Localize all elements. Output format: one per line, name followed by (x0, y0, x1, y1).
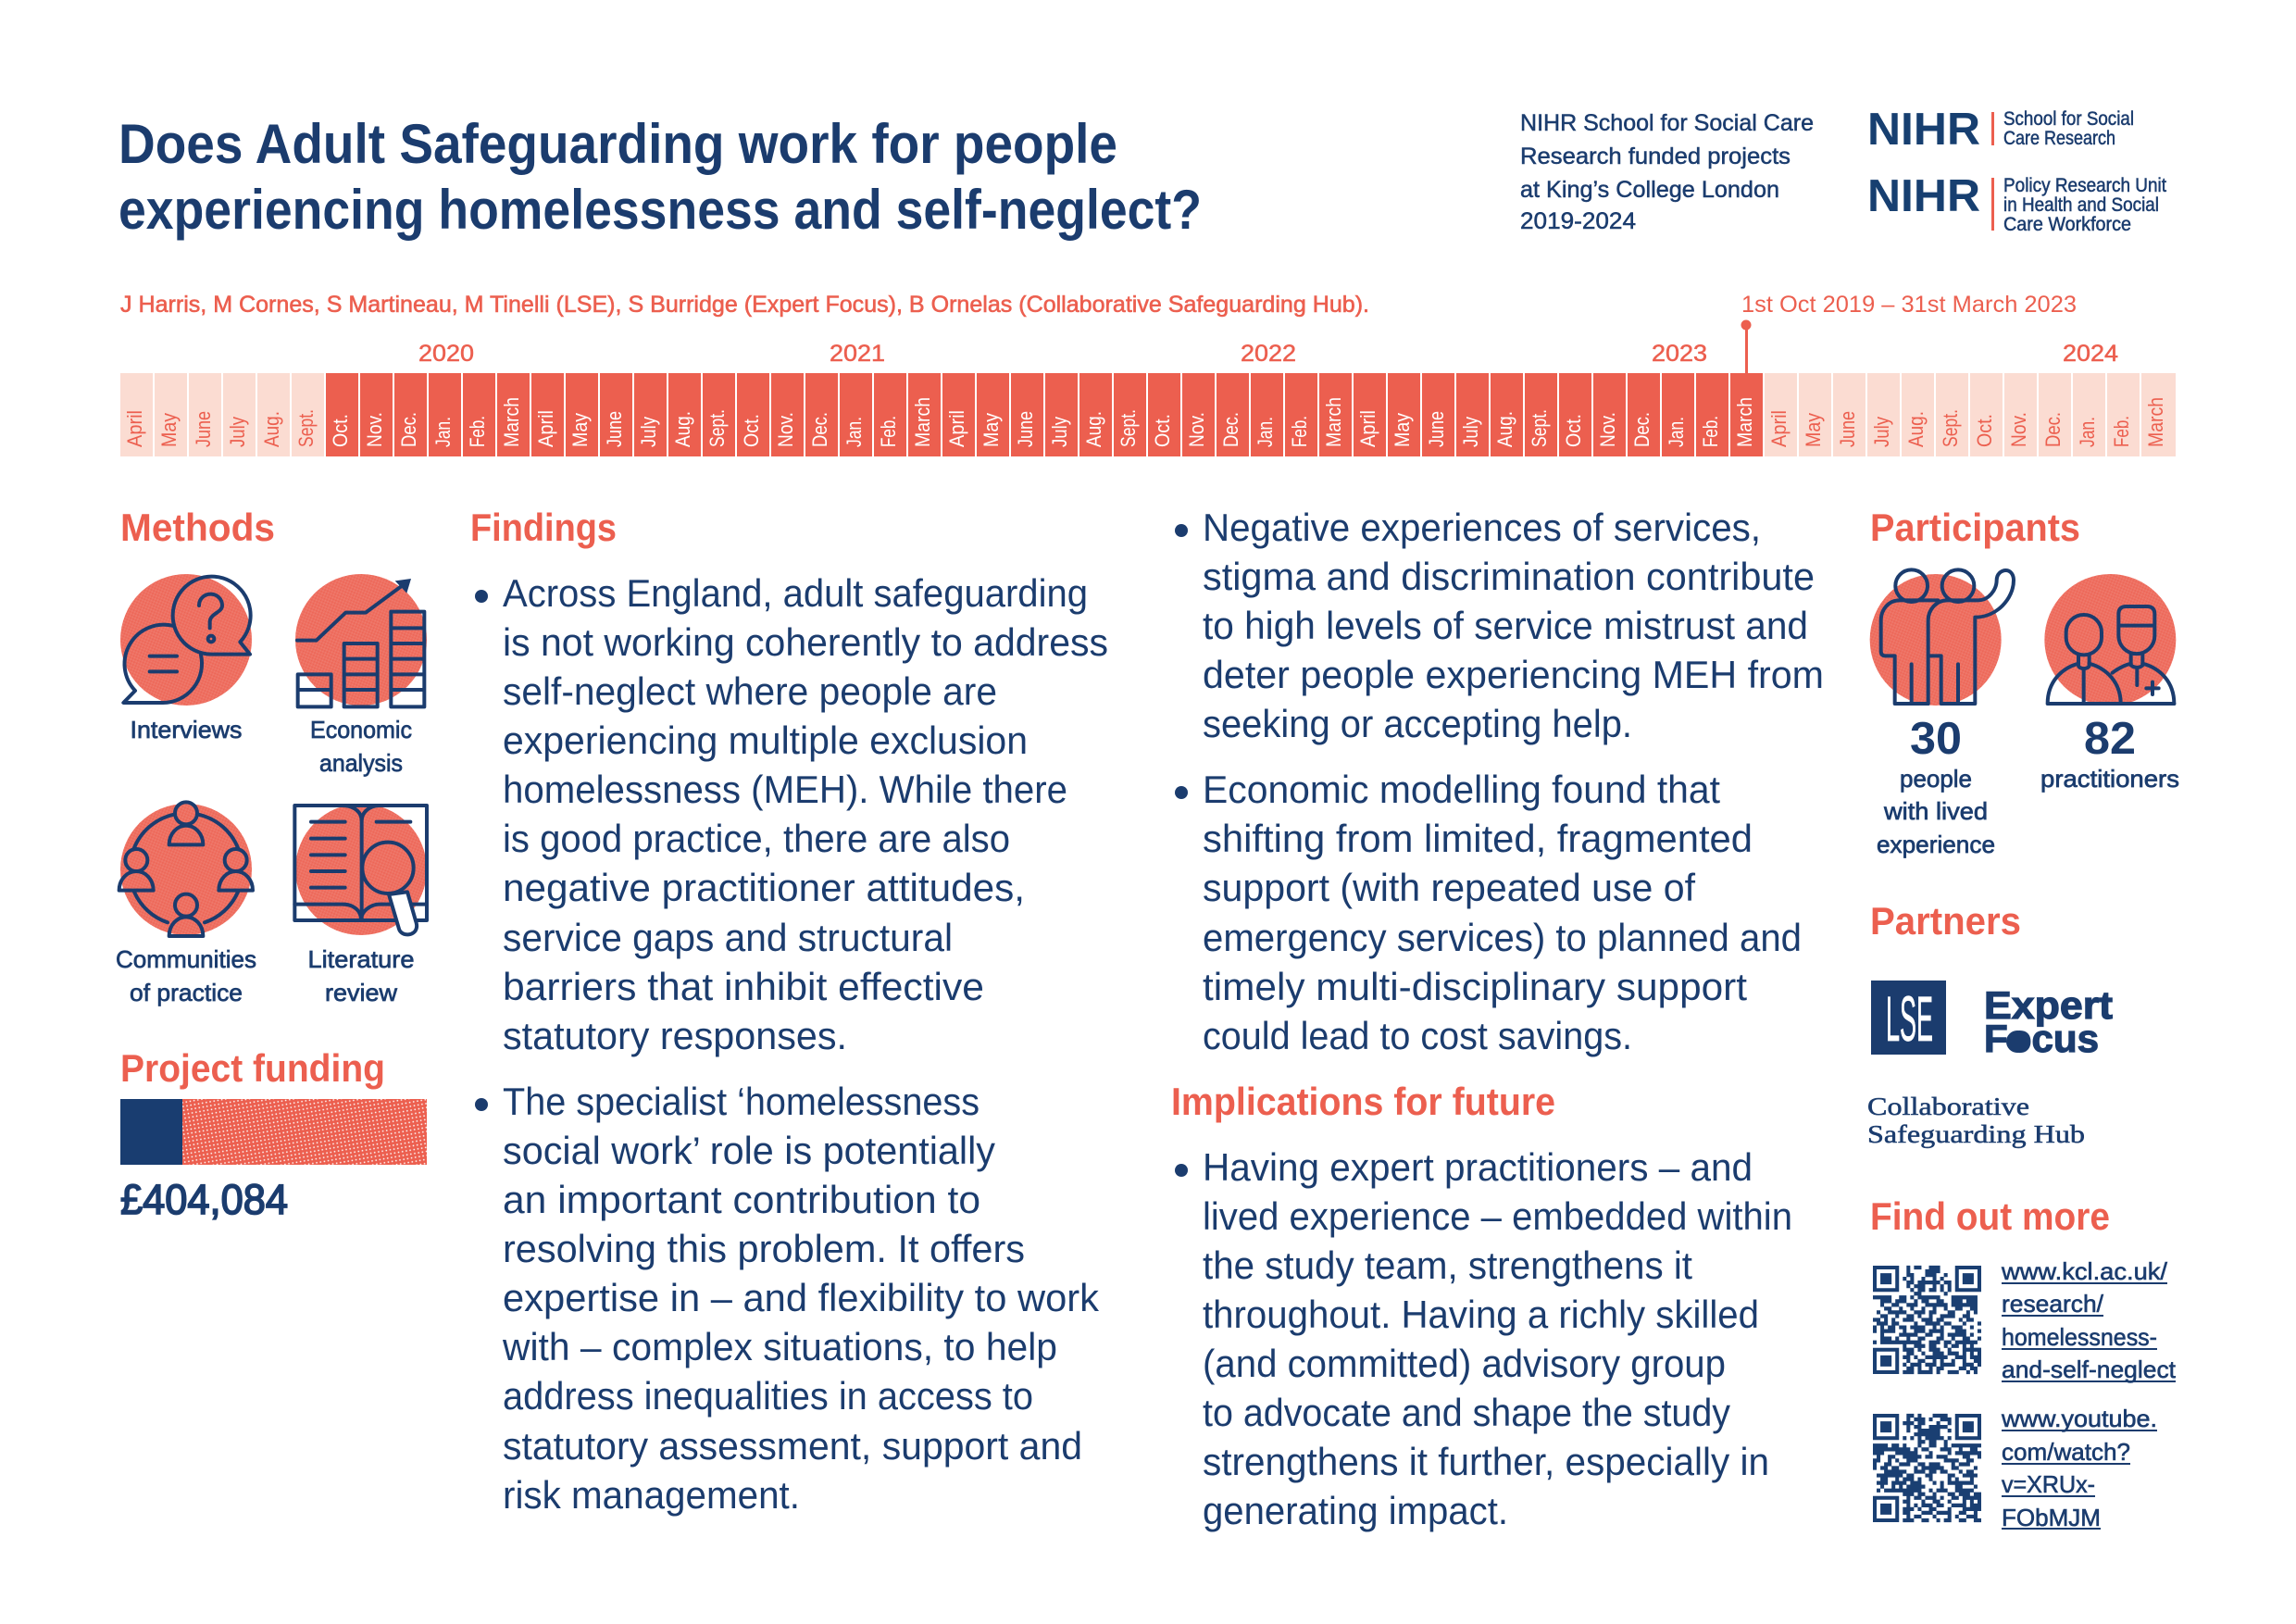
label: economic analysis: analysis (319, 749, 403, 777)
logo: Expert Focus: Focus (1984, 1017, 2099, 1060)
findings bullet 3: deter people experiencing MEH from (1203, 653, 1824, 696)
findings bullet 2: address inequalities in access to (503, 1374, 1033, 1418)
month labels: Nov. (363, 412, 386, 447)
findings bullet 1: experiencing multiple exclusion (503, 718, 1028, 762)
month labels: Feb. (466, 416, 489, 447)
month labels: April (945, 410, 968, 447)
funding statement: at King’s College London (1520, 177, 1779, 203)
findings bullet 2: social work’ role is potentially (503, 1129, 995, 1172)
label: literature review: review (325, 979, 397, 1006)
project dates label: 1st Oct 2019 – 31st March 2023 (1741, 292, 2077, 318)
link: KCL project page: homelessness- (2002, 1323, 2157, 1351)
month labels: April (1356, 410, 1379, 447)
logo: NIHR School for Social Care Research (1867, 105, 2134, 155)
label: literature review: Literature (307, 945, 415, 973)
month labels: Aug. (1082, 411, 1105, 447)
findings bullet 4: shifting from limited, fragmented (1203, 817, 1753, 860)
stat: 30 people: people (1900, 765, 1972, 793)
year labels (418, 341, 2118, 367)
findings bullet 2: risk management. (503, 1473, 800, 1517)
icon: people with lived experience (1870, 569, 2014, 706)
heading: findings: Findings (470, 506, 617, 549)
findings bullet 3: Negative experiences of services, (1203, 506, 1761, 549)
light cells: before project (120, 373, 324, 456)
year labels: 2023 (1652, 341, 1707, 367)
month labels: Dec. (1630, 412, 1653, 447)
label: communities of practice: Communities (116, 945, 256, 973)
QR code: YouTube video (1873, 1414, 1981, 1522)
month labels (123, 397, 2167, 447)
month labels: Jan. (1254, 417, 1277, 447)
findings bullet 4: emergency services) to planned and (1203, 916, 1802, 959)
month labels: April (534, 410, 557, 447)
year labels: 2022 (1241, 341, 1296, 367)
month labels: Sept. (705, 409, 729, 447)
title: Does Adult Safeguarding work for people (119, 113, 1117, 175)
logo: NIHR School for Social Care Research: Care Research (2003, 128, 2115, 149)
implications text: generating impact. (1203, 1489, 1508, 1532)
link: YouTube video: com/watch? (2002, 1438, 2130, 1466)
month labels: Nov. (774, 412, 797, 447)
light cells: after project (1765, 373, 2176, 456)
logo: Expert Focus (1984, 983, 2113, 1060)
icon: economic analysis (295, 574, 427, 706)
implications text: throughout. Having a richly skilled (1203, 1293, 1759, 1336)
funding statement: 2019-2024 (1520, 208, 1636, 234)
logo: NIHR School for Social Care Research: NIHR (1867, 105, 1980, 155)
findings bullet 2: statutory assessment, support and (503, 1424, 1082, 1468)
month labels: March (2144, 397, 2167, 447)
logo: NIHR Policy Research Unit: NIHR (1867, 171, 1980, 221)
stat: 30 people: experience (1877, 831, 1995, 858)
link: KCL project page: www.kcl.ac.uk/ (2001, 1257, 2168, 1285)
logo: Expert Focus: Expert (1984, 983, 2113, 1027)
month labels: July (226, 417, 249, 447)
implications text: strengthens it further, especially in (1203, 1440, 1769, 1483)
findings bullet 3: stigma and discrimination contribute (1203, 555, 1815, 598)
findings bullet 1: is not working coherently to address (503, 620, 1108, 664)
logo: NIHR Policy Research Unit: Policy Research Unit (2003, 175, 2166, 196)
logo: Collaborative Safeguarding Hub: Safeguarding Hub (1867, 1120, 2085, 1148)
month labels: Oct. (329, 414, 352, 447)
stat: 82 practitioners: practitioners (2040, 765, 2179, 793)
month labels: Sept. (294, 409, 318, 447)
timeline (120, 320, 2176, 456)
month labels: Jan. (431, 417, 455, 447)
logo: NIHR School for Social Care Research: School for Social (2003, 108, 2134, 130)
month labels: March (1733, 397, 1756, 447)
findings bullet 4: support (with repeated use of (1203, 866, 1695, 909)
implications text: to advocate and shape the study (1203, 1391, 1730, 1434)
month labels: Nov. (1185, 412, 1208, 447)
icon: literature review (294, 804, 427, 935)
link: YouTube video (2001, 1405, 2157, 1531)
icon: practitioners (2044, 574, 2176, 706)
month labels: Jan. (842, 417, 866, 447)
month labels: Aug. (1493, 411, 1516, 447)
funding statement: NIHR School for Social Care (1520, 110, 1814, 136)
month labels: Feb. (877, 416, 900, 447)
logo: Collaborative Safeguarding Hub (1867, 1093, 2085, 1148)
year labels: 2021 (830, 341, 885, 367)
funding statement: Research funded projects (1520, 144, 1791, 169)
findings bullet 2: with – complex situations, to help (502, 1325, 1057, 1368)
findings bullet 3: seeking or accepting help. (1203, 702, 1632, 745)
month labels: May (568, 413, 592, 447)
stat: 30 people: 30 (1910, 714, 1962, 764)
heading: partners: Partners (1870, 899, 2021, 943)
icon: communities of practice (119, 802, 253, 936)
implications text: the study team, strengthens it (1203, 1243, 1692, 1287)
stat: 82 practitioners (2040, 714, 2179, 793)
authors: J Harris, M Cornes, S Martineau, M Tinelli (LSE), S Burridge (Expert Focus), B Ornelas (Collaborative Safeguarding Hub). (120, 292, 1369, 318)
findings bullet 2: The specialist ‘homelessness (503, 1080, 980, 1123)
funding amount: £404,084 (120, 1176, 288, 1223)
month labels: Sept. (1528, 409, 1551, 447)
label: economic analysis (310, 716, 412, 777)
month labels: Feb. (1288, 416, 1311, 447)
stat: 30 people: with lived (1883, 797, 1988, 825)
stat: 82 practitioners: 82 (2084, 714, 2136, 764)
implications text: lived experience – embedded within (1203, 1194, 1792, 1238)
findings bullet 1: barriers that inhibit effective (503, 965, 984, 1008)
month labels: Oct. (1151, 414, 1174, 447)
month labels: Dec. (2041, 412, 2065, 447)
month labels: June (603, 411, 626, 447)
month labels: July (1870, 417, 1893, 447)
month labels: June (1014, 411, 1037, 447)
QR code: KCL project page (1873, 1266, 1981, 1374)
logo: NIHR Policy Research Unit: in Health and Social (2003, 194, 2159, 216)
year labels: 2024 (2063, 341, 2118, 367)
findings bullet 2: resolving this problem. It offers (503, 1227, 1025, 1270)
month labels: April (123, 410, 146, 447)
findings bullet 3 (1175, 506, 1824, 745)
findings bullet 1 (475, 571, 1108, 1057)
month labels: Sept. (1939, 409, 1962, 447)
month labels: Dec. (808, 412, 831, 447)
month labels: July (1048, 417, 1071, 447)
link: YouTube video: www.youtube. (2001, 1405, 2157, 1432)
month labels: March (911, 397, 934, 447)
month labels: Dec. (1219, 412, 1242, 447)
label: literature review (307, 945, 415, 1006)
month labels: May (1391, 413, 1414, 447)
logo: Collaborative Safeguarding Hub: Collaborative (1867, 1093, 2029, 1120)
findings bullet 1: Across England, adult safeguarding (503, 571, 1088, 615)
findings bullet 1: self-neglect where people are (503, 669, 997, 713)
heading: methods: Methods (120, 506, 275, 549)
stat: 30 people (1877, 714, 1995, 858)
month labels: June (1836, 411, 1859, 447)
label: communities of practice (116, 945, 256, 1006)
findings bullet 4: could lead to cost savings. (1203, 1014, 1632, 1057)
findings bullet 4 (1175, 768, 1802, 1057)
month labels: May (1802, 413, 1825, 447)
funding statement (1520, 110, 1814, 234)
month labels: June (192, 411, 215, 447)
month labels: Nov. (1596, 412, 1619, 447)
month labels: Oct. (1562, 414, 1585, 447)
month labels: May (157, 413, 181, 447)
month labels: Feb. (2110, 416, 2133, 447)
findings bullet 1: homelessness (MEH). While there (503, 768, 1067, 811)
month labels: July (1459, 417, 1482, 447)
month labels: March (500, 397, 523, 447)
findings bullet 4: Economic modelling found that (1203, 768, 1720, 811)
end date marker (1741, 320, 1752, 373)
month labels: March (1322, 397, 1345, 447)
text: LSE (1886, 983, 1933, 1055)
month labels: Feb. (1699, 416, 1722, 447)
month labels: Aug. (1904, 411, 1928, 447)
findings bullet 1: statutory responses. (503, 1014, 847, 1057)
link: KCL project page: and-self-neglect (2002, 1355, 2177, 1383)
findings bullet 4: timely multi-disciplinary support (1203, 965, 1747, 1008)
month labels: Jan. (2076, 417, 2099, 447)
label: interviews: Interviews (130, 716, 243, 743)
implications text: (and committed) advisory group (1203, 1342, 1726, 1385)
month labels: May (980, 413, 1003, 447)
heading: find out more: Find out more (1870, 1194, 2110, 1238)
month labels: June (1425, 411, 1448, 447)
title (119, 113, 1202, 241)
month labels: Oct. (1973, 414, 1996, 447)
label: communities of practice: of practice (130, 979, 243, 1006)
findings bullet 1: service gaps and structural (503, 916, 953, 959)
title: experiencing homelessness and self-neglect? (119, 179, 1202, 241)
dark cells: project duration (326, 373, 1763, 456)
findings bullet 1: is good practice, there are also (503, 817, 1010, 860)
findings bullet 2: an important contribution to (503, 1178, 980, 1221)
heading: participants: Participants (1870, 506, 2080, 549)
link: YouTube video: FObMJM (2002, 1504, 2101, 1531)
month labels: Dec. (397, 412, 420, 447)
link: KCL project page: research/ (2002, 1290, 2104, 1318)
findings bullet 3: to high levels of service mistrust and (1203, 604, 1808, 647)
heading: project funding: Project funding (120, 1046, 385, 1090)
logo: NIHR Policy Research Unit: Care Workforce (2003, 214, 2131, 235)
month labels: Oct. (740, 414, 763, 447)
month labels: April (1767, 410, 1791, 447)
findings bullet 2 (475, 1080, 1100, 1517)
icon: interviews (120, 574, 252, 706)
link: YouTube video: v=XRUx- (2002, 1470, 2095, 1498)
month labels: Nov. (2007, 412, 2030, 447)
findings bullet 2: expertise in – and flexibility to work (503, 1276, 1100, 1319)
heading: implications for future: Implications for future (1171, 1080, 1555, 1123)
link: KCL project page (2001, 1257, 2177, 1383)
month labels: Sept. (1117, 409, 1140, 447)
findings bullet 1: negative practitioner attitudes, (503, 866, 1025, 909)
month labels: Jan. (1665, 417, 1688, 447)
funding bar (120, 1099, 427, 1165)
logo: LSE (1871, 981, 1946, 1055)
year labels: 2020 (418, 341, 474, 367)
month labels: Aug. (260, 411, 283, 447)
label: economic analysis: Economic (310, 716, 412, 743)
logo: NIHR Policy Research Unit (1867, 171, 2166, 235)
month labels: July (637, 417, 660, 447)
implications text: Having expert practitioners – and (1203, 1145, 1753, 1189)
implications text (1175, 1145, 1792, 1532)
month labels: Aug. (671, 411, 694, 447)
